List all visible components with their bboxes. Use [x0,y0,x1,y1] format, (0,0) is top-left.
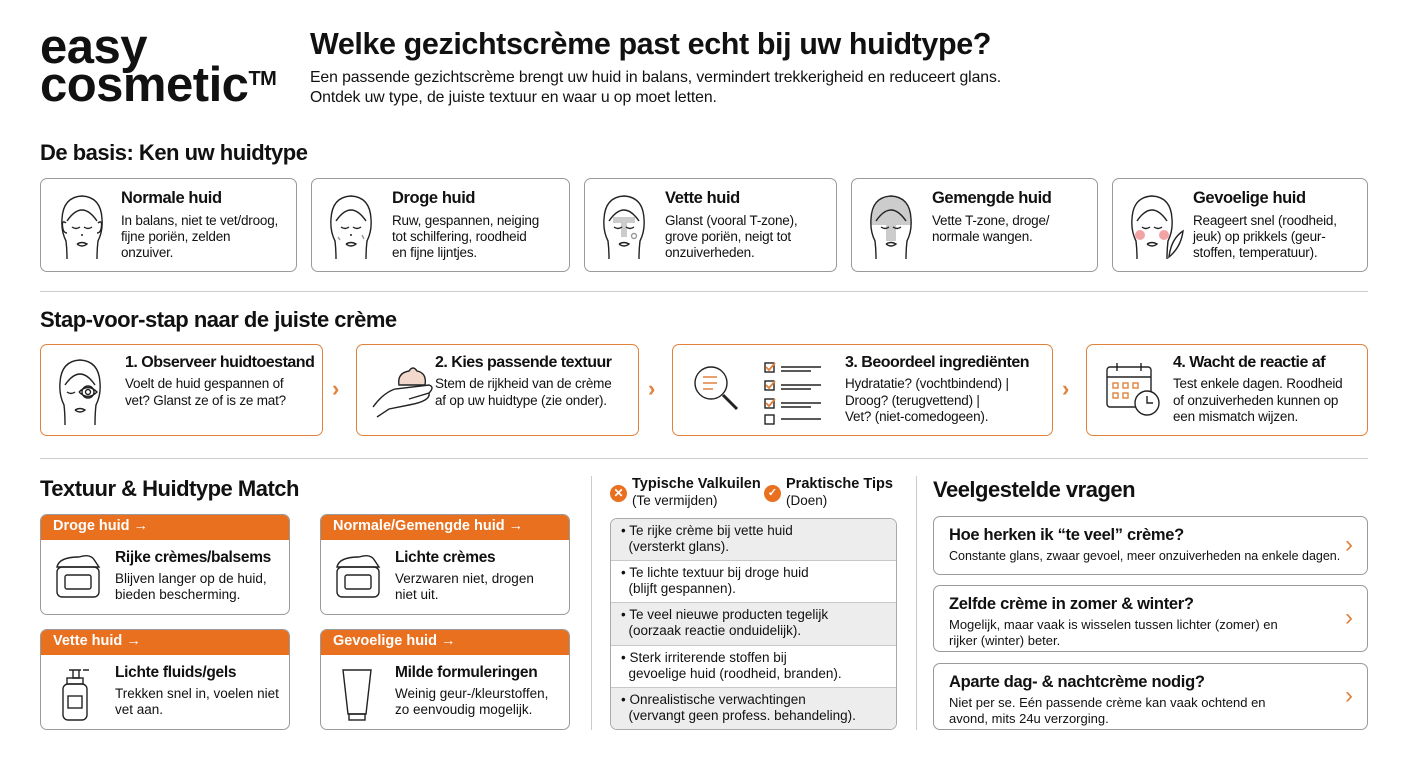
match: vette huid: Trekken snel in, voelen niet [115,686,279,701]
header: tips [764,476,893,508]
icon: face oily [603,195,645,259]
faq 2: Zelfde crème in zomer & winter? [949,595,1194,613]
match: normale/gemengde huid: Verzwaren niet, drogen [395,571,534,586]
list: pitfalls: • Te lichte textuur bij droge huid [621,565,809,580]
match: gevoelige huid [320,629,570,730]
list: pitfalls: (vervangt geen profess. behandeling). [628,708,856,723]
icon: pump bottle [62,669,89,721]
step 4: of onzuiverheden kunnen op [1173,392,1338,408]
subtitle: Ontdek uw type, de juiste textuur en waar u op moet letten. [310,89,717,106]
card: gevoelige huid: jeuk) op prikkels (geur- [1193,229,1326,244]
icon: face combination [870,195,912,259]
icon: tube [342,669,372,721]
match: gevoelige huid: Gevoelige huid → [333,633,455,649]
heading: basis: De basis: Ken uw huidtype [40,140,307,165]
faq 1: Constante glans, zwaar gevoel, meer onzuiverheden na enkele dagen. [949,549,1340,563]
step 2: Stem de rijkheid van de crème [435,376,612,391]
match: droge huid: bieden bescherming. [115,587,240,602]
card: droge huid: tot schilfering, roodheid [392,229,527,244]
arrow 1: › [332,376,339,401]
step 1: Voelt de huid gespannen of [125,376,283,391]
header: valkuilen: (Te vermijden) [632,493,718,508]
card: droge huid [311,178,570,272]
list: pitfalls: gevoelige huid (roodheid, branden). [628,666,842,681]
card: vette huid: Vette huid [665,189,740,207]
icon: face dry [330,195,372,259]
step 2: af op uw huidtype (zie onder). [435,392,607,408]
faq 2: Mogelijk, maar vaak is wisselen tussen lichter (zomer) en [949,617,1278,632]
list: pitfalls: • Te rijke crème bij vette huid [621,523,793,538]
card: normale huid: Normale huid [121,189,222,207]
header: tips: (Doen) [786,493,827,508]
panel: texture match [40,514,570,730]
match: vette huid: vet aan. [115,702,163,717]
card: vette huid [584,178,837,272]
subtitle: Een passende gezichtscrème brengt uw huid in balans, vermindert trekkerigheid en reduceert glans. [310,69,1001,86]
faq 3: Niet per se. Eén passende crème kan vaak ochtend en [949,695,1266,710]
faq 2: › [1345,604,1353,631]
faq 1 [933,516,1368,575]
icon: magnifier and checklist [694,362,821,425]
card: gevoelige huid: stoffen, temperatuur). [1193,245,1317,260]
panel: valkuilen & tips [610,476,897,730]
faq 3: avond, mits 24u verzorging. [949,711,1109,726]
step 2: 2. Kies passende textuur [435,354,612,371]
match: normale/gemengde huid: Normale/Gemengde huid → [333,518,523,534]
faq 3: › [1345,682,1353,709]
match: vette huid: Lichte fluids/gels [115,664,236,681]
list: pitfalls [610,518,897,730]
panel: skin types [40,178,1368,272]
match: gevoelige huid: Milde formuleringen [395,664,537,681]
step 3 [672,344,1053,436]
card: normale huid: In balans, niet te vet/droog, [121,213,278,228]
icon: face with eye [59,359,101,425]
match: droge huid: Rijke crèmes/balsems [115,549,271,566]
step 1: 1. Observeer huidtoestand [125,354,314,371]
heading: faq: Veelgestelde vragen [933,477,1135,502]
match: vette huid [40,629,290,730]
step 4: 4. Wacht de reactie af [1173,354,1325,371]
step 1 [40,344,323,436]
header: valkuilen [610,476,761,508]
list: pitfalls: (blijft gespannen). [628,581,736,596]
list: pitfalls: • Sterk irriterende stoffen bij [621,650,787,665]
card: droge huid: Droge huid [392,189,475,207]
card: gemengde huid: Vette T-zone, droge/ [932,213,1049,228]
step 2 [356,344,639,436]
match: droge huid [40,514,290,615]
faq 1: › [1345,531,1353,558]
title: Welke gezichtscrème past echt bij uw huidtype? [310,27,991,61]
header: tips: ✓ [768,487,777,499]
card: normale huid: onzuiver. [121,245,173,260]
match: droge huid: Blijven langer op de huid, [115,571,267,586]
faq 3 [933,663,1368,730]
card: gemengde huid: Gemengde huid [932,189,1051,207]
card: gevoelige huid: Reageert snel (roodheid, [1193,213,1337,228]
step 1: vet? Glanst ze of is ze mat? [125,392,286,408]
logo: cosmeticTM [40,58,276,112]
card: gemengde huid: normale wangen. [932,229,1033,244]
panel: steps [40,344,1368,436]
card: normale huid: fijne poriën, zelden [121,229,230,244]
step 4 [1086,344,1368,436]
card: droge huid: en fijne lijntjes. [392,245,477,260]
icon: jar [56,555,100,598]
faq 2 [933,585,1368,652]
match: normale/gemengde huid: niet uit. [395,587,439,602]
card: gevoelige huid [1112,178,1368,272]
arrow 2: › [648,376,655,401]
match: normale/gemengde huid: Lichte crèmes [395,549,495,566]
card: vette huid: onzuiverheden. [665,245,755,260]
step 4: Test enkele dagen. Roodheid [1173,376,1342,391]
faq 3: Aparte dag- & nachtcrème nodig? [949,673,1205,691]
logo [40,20,276,112]
step 3: Droog? (terugvettend) | [845,392,980,408]
list: pitfalls: • Te veel nieuwe producten tegelijk [621,607,828,622]
list: pitfalls: (versterkt glans). [628,539,729,554]
heading: stappen: Stap-voor-stap naar de juiste crème [40,307,397,332]
card: vette huid: grove poriën, neigt tot [665,229,791,244]
match: gevoelige huid: Weinig geur-/kleurstoffen, [395,686,548,701]
list: pitfalls: (oorzaak reactie onduidelijk). [628,623,801,638]
arrow 3: › [1062,376,1069,401]
icon: calendar clock [1106,363,1160,416]
icon: jar light [336,555,380,598]
faq 1: Hoe herken ik “te veel” crème? [949,526,1184,544]
heading: textuur: Textuur & Huidtype Match [40,476,299,501]
step 3: Hydratatie? (vochtbindend) | [845,376,1009,391]
list: pitfalls: • Onrealistische verwachtingen [621,692,806,707]
card: vette huid: Glanst (vooral T-zone), [665,213,797,228]
icon: face [61,195,103,259]
header: valkuilen: ✕ [613,486,624,500]
card: normale huid [40,178,297,272]
logo: easy [40,20,147,74]
step 3: Vet? (niet-comedogeen). [845,409,988,424]
match: vette huid: Vette huid → [53,633,141,649]
step 4: een mismatch wijzen. [1173,409,1298,424]
card: gevoelige huid: Gevoelige huid [1193,189,1306,207]
icon: face sensitive [1131,195,1184,259]
card: gemengde huid [851,178,1098,272]
match: gevoelige huid: zo eenvoudig mogelijk. [395,702,532,717]
match: normale/gemengde huid [320,514,570,615]
faq 2: rijker (winter) beter. [949,633,1060,648]
match: droge huid: Droge huid → [53,518,148,534]
step 3: 3. Beoordeel ingrediënten [845,354,1029,371]
subtitle [310,69,1001,106]
header: tips: Praktische Tips [786,476,893,492]
icon: hand with cream [372,367,433,418]
card: droge huid: Ruw, gespannen, neiging [392,213,539,228]
header: valkuilen: Typische Valkuilen [632,476,761,492]
